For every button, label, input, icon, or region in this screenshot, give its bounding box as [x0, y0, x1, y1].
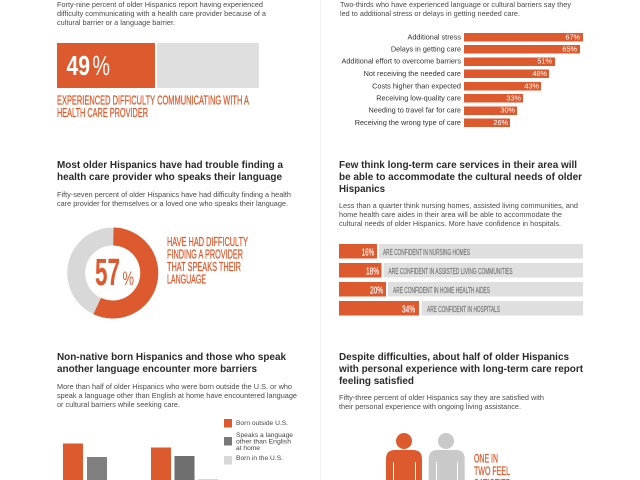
heading: satisfaction: feeling satisfied — [339, 376, 414, 387]
caption: 57 percent: LANGUAGE — [167, 272, 206, 286]
text: confidence intro: Less than a quarter think nursing homes, assisted living communities, and — [339, 201, 578, 210]
caption: one in two — [474, 452, 511, 480]
bar chart: consequences: 65% — [562, 44, 578, 54]
bar chart: consequences: Additional stress — [407, 32, 461, 42]
caption: 49 percent: HEALTH CARE PROVIDER — [57, 106, 148, 120]
legend: barriers by group: other than English — [236, 438, 292, 446]
heading: non-native barriers: another language encounter more barriers — [57, 364, 257, 375]
heading: satisfaction: Despite difficulties, about half of older Hispanics — [339, 352, 569, 363]
heading: long-term care confidence: Hispanics — [339, 184, 385, 195]
bar chart: consequences: Costs higher than expected — [372, 82, 461, 90]
icon: orange person — [386, 433, 422, 480]
bar chart: confidence — [339, 244, 583, 316]
bar chart: consequences: 30% — [500, 106, 516, 114]
heading: long-term care confidence: Few think long-term care services in their area will — [339, 160, 577, 171]
text: provider intro — [57, 190, 291, 208]
legend: barriers by group: at home — [236, 445, 261, 452]
bar chart: barriers by group — [63, 444, 218, 480]
bar: 49 percent share: 49 — [66, 50, 90, 81]
text: satisfaction intro: Fifty-three percent of older Hispanics say they are satisfied with — [339, 393, 544, 402]
bar chart: consequences: Not receiving the needed care — [364, 69, 461, 78]
text: consequences intro — [340, 0, 571, 18]
bar chart: confidence: 34% — [402, 304, 415, 316]
text: provider intro: Fifty-seven percent of older Hispanics have had difficulty finding a health — [57, 190, 291, 199]
bar chart: consequences: Receiving the wrong type of care — [355, 118, 461, 127]
heading: finding a provider: Most older Hispanics have had trouble finding a — [57, 160, 283, 171]
panel: satisfaction — [338, 352, 584, 480]
legend: barriers by group: Speaks a language — [236, 432, 294, 439]
text: non-native intro — [57, 382, 297, 409]
text: satisfaction intro — [339, 393, 544, 411]
bar chart: consequences: 33% — [506, 94, 522, 102]
bar chart: consequences: Delays in getting care — [391, 44, 461, 54]
legend: barriers by group: Born in the U.S. — [236, 455, 283, 462]
text: satisfaction intro: their personal experience with ongoing living assistance. — [339, 402, 521, 411]
heading: long-term care confidence — [339, 160, 582, 195]
caption: 49 percent — [57, 94, 249, 120]
bar chart: confidence: 16% — [362, 246, 374, 258]
caption: 57 percent — [167, 235, 248, 286]
donut chart: 57 percent — [76, 236, 149, 310]
bar chart: confidence: ARE CONFIDENT IN NURSING HOMES — [383, 247, 470, 257]
text: confidence intro: cultural needs of older Hispanics. More have confidence in hospitals. — [339, 219, 561, 228]
text: consequences intro: Two-thirds who have experienced language or cultural barriers say they — [340, 0, 571, 9]
bar chart: confidence: 20% — [370, 284, 383, 296]
panel: long-term care confidence — [339, 160, 583, 316]
bar chart: confidence: 18% — [366, 266, 379, 278]
text: non-native intro: More than half of older Hispanics who were born outside the U.S. or who — [57, 382, 292, 391]
caption: one in two: TWO FEEL — [474, 464, 510, 478]
heading: non-native barriers: Non-native born Hispanics and those who speak — [57, 352, 286, 363]
bar chart: consequences: Receiving low-quality care — [376, 94, 461, 102]
donut chart: 57 percent: % — [122, 269, 134, 290]
text: consequences intro: led to additional stress or delays in getting needed care. — [340, 9, 520, 18]
bar chart: confidence: ARE CONFIDENT IN HOSPITALS — [427, 304, 500, 314]
text: provider intro: care provider for themselves or a loved one who speaks their language. — [57, 199, 288, 208]
bar chart: consequences: Additional effort to overcome barriers — [341, 56, 461, 66]
bar chart: consequences: Needing to travel far for care — [369, 106, 461, 114]
panel: consequences of barriers — [340, 0, 583, 127]
bar chart: consequences: 43% — [524, 82, 540, 90]
bar chart: consequences — [341, 32, 583, 127]
donut chart: 57 percent: 57 — [95, 252, 120, 294]
caption: 49 percent: EXPERIENCED DIFFICULTY COMMUNICATING WITH A — [57, 94, 249, 108]
text: communication intro — [57, 0, 267, 27]
text: confidence intro: home health care aides in their area will be able to accommodate the — [339, 210, 562, 219]
legend: barriers by group — [224, 419, 294, 464]
text: non-native intro: or cultural barriers while seeking care. — [57, 400, 180, 409]
panel: finding a provider — [57, 160, 291, 310]
text: communication intro: difficulty communicating with a health care provider because of a — [57, 9, 267, 18]
heading: satisfaction: with personal experience with long-term care report — [338, 364, 584, 375]
caption: 57 percent: HAVE HAD DIFFICULTY — [167, 235, 248, 249]
heading: satisfaction — [338, 352, 584, 387]
caption: one in two: ONE IN — [474, 452, 498, 466]
caption: 57 percent: THAT SPEAKS THEIR — [167, 260, 241, 274]
heading: long-term care confidence: be able to accommodate the cultural needs of older — [339, 172, 582, 183]
panel: communication difficulty — [57, 0, 267, 120]
bar: 49 percent share: % — [92, 50, 110, 81]
bar chart: confidence: ARE CONFIDENT IN ASSISTED LIVING COMMUNITIES — [388, 266, 513, 276]
text: confidence intro — [339, 201, 578, 228]
bar chart: consequences: 26% — [493, 118, 509, 127]
heading: finding a provider — [57, 160, 283, 183]
panel: non-native barriers — [57, 352, 297, 480]
legend: barriers by group: Born outside U.S. — [236, 420, 288, 427]
caption: 57 percent: FINDING A PROVIDER — [167, 248, 243, 262]
text: non-native intro: speak a language other than English at home have encountered language — [57, 391, 297, 400]
bar chart: consequences: 48% — [532, 69, 548, 78]
bar: 49 percent share — [57, 43, 259, 88]
heading: finding a provider: health care provider who speaks their language — [57, 172, 282, 183]
bar chart: consequences: 67% — [565, 32, 581, 42]
text: communication intro: Forty-nine percent of older Hispanics report having experienced — [57, 0, 263, 9]
icon: grey person — [429, 433, 465, 480]
bar chart: confidence: ARE CONFIDENT IN HOME HEALTH AIDES — [393, 285, 490, 295]
text: communication intro: cultural barrier or a language barrier. — [57, 18, 175, 27]
heading: non-native barriers — [57, 352, 286, 375]
bar chart: consequences: 51% — [537, 56, 553, 66]
